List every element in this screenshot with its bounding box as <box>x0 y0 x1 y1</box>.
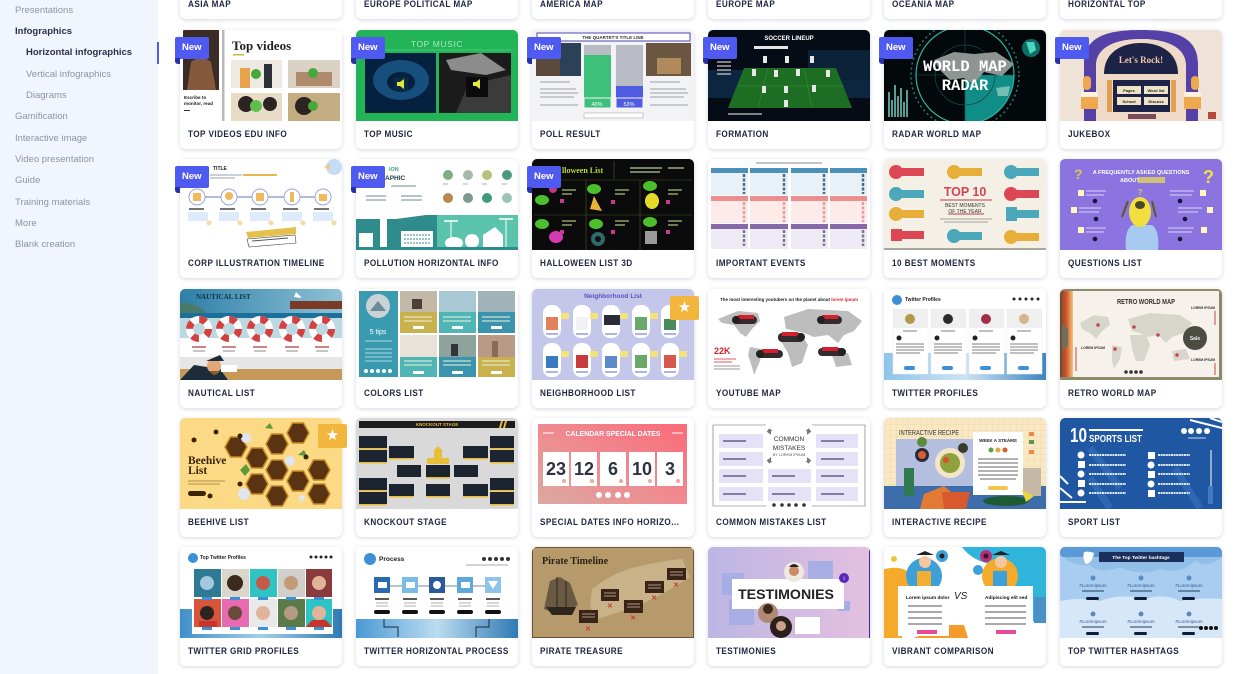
title: SPECIAL DATES INFO HORIZO... <box>540 517 679 528</box>
thumbnail: knockout bracket: KNOCKOUT STAGE <box>416 422 458 427</box>
thumbnail: pollution <box>356 160 518 250</box>
card: YouTube map <box>708 289 870 408</box>
thumbnail: nautical <box>180 289 342 380</box>
title: TWITTER GRID PROFILES <box>188 646 299 657</box>
title: NEIGHBORHOOD LIST <box>540 388 636 399</box>
title: POLLUTION HORIZONTAL INFO <box>364 258 499 269</box>
thumbnail: top videos: monitor, read <box>184 101 213 106</box>
title: POLL RESULT <box>540 129 601 140</box>
thumbnail: knockout bracket <box>356 418 518 509</box>
badge: new <box>351 37 385 59</box>
thumbnail: pirate map: ✕ <box>651 595 657 602</box>
thumbnail: halloween: lloween List <box>562 166 603 175</box>
badge: new <box>527 37 561 59</box>
card: Sport list <box>1060 418 1222 537</box>
card: Colors list <box>356 289 518 408</box>
badge: new <box>175 166 209 188</box>
card: Testimonies <box>708 547 870 666</box>
thumbnail: sports list: 10 <box>1070 425 1087 447</box>
thumbnail: testimonies: TESTIMONIES <box>738 587 834 602</box>
thumbnail: radar <box>884 30 1046 121</box>
badge: new: New <box>358 171 378 182</box>
thumbnail: halloween <box>532 159 694 250</box>
badge: new: New <box>534 171 554 182</box>
card: America map <box>532 0 694 19</box>
title: NAUTICAL LIST <box>188 388 255 399</box>
sidebar navigation: Interactive image <box>15 133 87 144</box>
thumbnail: comparison <box>884 547 1046 638</box>
card: Radar world map <box>884 30 1046 149</box>
card: Retro world map <box>1060 289 1222 408</box>
thumbnail: sports list <box>1060 418 1222 509</box>
title: COLORS LIST <box>364 388 424 399</box>
thumbnail: top 10 ribbons: OF THE YEAR <box>948 209 982 215</box>
thumbnail: calendar special dates <box>534 419 687 504</box>
badge: new <box>879 37 913 59</box>
thumbnail: pirate map: ✕ <box>585 626 591 633</box>
badge: new <box>527 166 561 188</box>
badge: new <box>175 37 209 59</box>
title: JUKEBOX <box>1068 129 1111 140</box>
thumbnail: soccer formation <box>708 30 870 121</box>
thumbnail: sports list: SPORTS LIST <box>1089 434 1142 445</box>
title: TESTIMONIES <box>716 646 776 657</box>
thumbnail: common mistakes: MISTAKES <box>773 445 806 452</box>
sidebar navigation: Blank creation <box>15 239 75 250</box>
title: VIBRANT COMPARISON <box>892 646 994 657</box>
thumbnail: pirate map: Pirate Timeline <box>542 556 609 567</box>
thumbnail: interactive recipe <box>884 418 1046 509</box>
thumbnail: colors grid <box>358 290 515 377</box>
badge: new <box>703 37 737 59</box>
thumbnail: pollution: ION <box>389 167 399 173</box>
card: Questions list <box>1060 159 1222 278</box>
thumbnail: twitter profiles: Twitter Profiles <box>905 297 941 303</box>
sidebar navigation: Infographics <box>15 26 72 37</box>
thumbnail: jukebox: Word list <box>1147 88 1165 93</box>
thumbnail: poll result <box>532 30 694 121</box>
badge: new: New <box>710 42 730 53</box>
thumbnail: youtube map: The most interesting youtubers on the planet about lorem ipsum <box>720 297 858 302</box>
thumbnail: testimonies <box>708 547 870 638</box>
badge: new: New <box>182 42 202 53</box>
thumbnail: radar: RADAR <box>942 77 989 95</box>
thumbnail: youtube map <box>710 290 862 375</box>
thumbnail: retro map: RETRO WORLD MAP <box>1117 297 1175 306</box>
card: Halloween list 3D <box>532 159 694 278</box>
thumbnail: top 10 ribbons: BEST MOMENTS <box>945 203 986 209</box>
thumbnail: questions: ? <box>1203 167 1214 187</box>
title: IMPORTANT EVENTS <box>716 258 806 269</box>
title: RADAR WORLD MAP <box>892 129 982 140</box>
thumbnail: interactive recipe: INTERACTIVE RECIPE <box>899 430 959 437</box>
card: Beehive list <box>180 418 342 537</box>
thumbnail: colors grid: 5 tips <box>370 329 387 336</box>
thumbnail: poll result: 53% <box>623 102 635 108</box>
card: Corp illustration timeline <box>180 159 342 278</box>
thumbnail: questions: ? <box>1074 166 1083 182</box>
thumbnail: comparison: Adipiscing elit sed <box>985 595 1027 601</box>
thumbnail: calendar special dates: 10 <box>632 459 652 479</box>
thumbnail: jukebox: Let's Rock! <box>1119 55 1163 65</box>
thumbnail: jukebox: School <box>1122 99 1136 104</box>
thumbnail: interactive recipe: WEEK A STEAMS <box>979 438 1017 443</box>
title: CORP ILLUSTRATION TIMELINE <box>188 258 325 269</box>
thumbnail: common mistakes <box>710 419 866 507</box>
thumbnail: retro map <box>1060 289 1222 380</box>
sidebar navigation: Presentations <box>15 5 73 16</box>
thumbnail: neighborhood <box>532 289 694 380</box>
title: BEEHIVE LIST <box>188 517 249 528</box>
thumbnail: top videos: Escribe to <box>184 95 206 100</box>
thumbnail: calendar special dates: 12 <box>574 459 594 479</box>
thumbnail: beehive: List <box>188 465 207 477</box>
card: Important events <box>708 159 870 278</box>
card: Vibrant comparison <box>884 547 1046 666</box>
card: Formation <box>708 30 870 149</box>
thumbnail: twitter grid: Top Twitter Profiles <box>200 555 246 561</box>
thumbnail: soccer formation: SOCCER LINEUP <box>764 36 814 42</box>
title: RETRO WORLD MAP <box>1068 388 1157 399</box>
title: YOUTUBE MAP <box>716 388 781 399</box>
card: Oceania map <box>884 0 1046 19</box>
thumbnail: top videos: Top videos <box>232 38 291 53</box>
thumbnail: poll result: THE QUARTET'S TITLE LINE <box>582 35 644 40</box>
card: Twitter horizontal process <box>356 547 518 666</box>
badge: new: New <box>182 171 202 182</box>
thumbnail: calendar special dates: 6 <box>608 459 618 479</box>
title: SPORT LIST <box>1068 517 1120 528</box>
thumbnail: jukebox: Discuss <box>1148 99 1164 104</box>
thumbnail: pollution: APHIC <box>385 175 406 182</box>
sidebar navigation: More <box>15 218 37 229</box>
badge: new: New <box>534 42 554 53</box>
sidebar navigation: Diagrams <box>26 90 67 101</box>
thumbnail: beehive: Beehive <box>188 455 226 467</box>
card: Pollution horizontal info <box>356 159 518 278</box>
thumbnail: neighborhood: Neighborhood List <box>584 293 643 300</box>
badge: new <box>1055 37 1089 59</box>
thumbnail: hashtags: The Top Twitter hashtags <box>1112 555 1170 561</box>
thumbnail: hashtags: #Loremipsum <box>1127 583 1155 588</box>
card: Neighborhood list <box>532 289 694 408</box>
thumbnail: pirate map: ✕ <box>630 615 636 622</box>
thumbnail: top music <box>356 30 518 121</box>
thumbnail: calendar special dates: 3 <box>665 459 675 479</box>
title: TWITTER HORIZONTAL PROCESS <box>364 646 509 657</box>
card: Asia map <box>180 0 342 19</box>
thumbnail: twitter profiles <box>884 290 1046 380</box>
card: Interactive recipe <box>884 418 1046 537</box>
sidebar navigation: Horizontal infographics <box>26 47 132 58</box>
title: TOP TWITTER HASHTAGS <box>1068 646 1179 657</box>
thumbnail: pirate map: ✕ <box>673 582 679 589</box>
thumbnail: questions: ABOUT <box>1120 178 1140 184</box>
thumbnail: pirate map <box>532 547 694 638</box>
thumbnail: top 10 ribbons <box>884 159 1046 250</box>
thumbnail: retro map: LOREM IPSUM <box>1191 358 1215 362</box>
thumbnail: important events table <box>710 160 867 249</box>
title: INTERACTIVE RECIPE <box>892 517 987 528</box>
badge: premium star <box>318 424 347 448</box>
thumbnail: timeline: TITLE <box>213 166 228 172</box>
card: Nautical list <box>180 289 342 408</box>
thumbnail: top videos <box>182 30 340 121</box>
thumbnail: comparison: VS <box>954 591 968 602</box>
sidebar navigation: Vertical infographics <box>26 69 111 80</box>
card: Knockout stage <box>356 418 518 537</box>
card: Top music <box>356 30 518 149</box>
thumbnail: poll result: 46% <box>591 102 603 108</box>
thumbnail: common mistakes: BY LOREM IPSUM <box>773 453 805 457</box>
card: Horizontal top <box>1060 0 1222 19</box>
sidebar navigation: Gamification <box>15 111 68 122</box>
badge: premium star: ★ <box>678 299 691 316</box>
thumbnail: hashtags <box>1060 547 1222 638</box>
title: COMMON MISTAKES LIST <box>716 517 827 528</box>
thumbnail: questions: A FREQUENTLY ASKED QUESTIONS <box>1093 170 1190 176</box>
thumbnail: nautical: NAUTICAL LIST <box>196 293 251 301</box>
badge: premium star <box>670 296 699 320</box>
sidebar navigation: Guide <box>15 175 40 186</box>
thumbnail: common mistakes: COMMON <box>774 436 804 443</box>
thumbnail: twitter grid <box>180 548 342 638</box>
title: QUESTIONS LIST <box>1068 258 1142 269</box>
title: PIRATE TREASURE <box>540 646 623 657</box>
thumbnail: retro map: Sale <box>1190 336 1200 342</box>
badge: new: New <box>886 42 906 53</box>
thumbnail: twitter process <box>356 548 518 638</box>
thumbnail: top 10 ribbons: TOP 10 <box>944 185 986 199</box>
card: Twitter profiles <box>884 289 1046 408</box>
card: Poll result <box>532 30 694 149</box>
thumbnail: radar: WORLD MAP <box>923 58 1007 76</box>
title: TWITTER PROFILES <box>892 388 978 399</box>
thumbnail: hashtags: #Loremipsum <box>1079 619 1107 624</box>
card: Common mistakes list <box>708 418 870 537</box>
thumbnail: hashtags: #Loremipsum <box>1079 583 1107 588</box>
thumbnail: beehive <box>180 418 342 509</box>
thumbnail: testimonies: i <box>843 576 845 582</box>
thumbnail: jukebox: Pages <box>1123 88 1136 93</box>
thumbnail: questions: ? <box>1138 188 1143 197</box>
badge: new: New <box>1062 42 1082 53</box>
thumbnail: top music: TOP MUSIC <box>411 39 463 49</box>
thumbnail: calendar special dates: CALENDAR SPECIAL DATES <box>566 431 661 438</box>
thumbnail: jukebox <box>1060 30 1222 121</box>
thumbnail: timeline <box>182 159 342 248</box>
sidebar navigation <box>0 0 158 674</box>
card: 10 best moments <box>884 159 1046 278</box>
thumbnail: hashtags: #Loremipsum <box>1175 583 1203 588</box>
title: 10 BEST MOMENTS <box>892 258 976 269</box>
badge: new: New <box>358 42 378 53</box>
badge: new <box>351 166 385 188</box>
thumbnail: pirate map: ✕ <box>607 603 613 610</box>
title: FORMATION <box>716 129 769 140</box>
card: Top videos edu info <box>180 30 342 149</box>
title: TOP MUSIC <box>364 129 413 140</box>
badge: premium star: ★ <box>326 427 339 444</box>
card: Europe map <box>708 0 870 19</box>
title: TOP VIDEOS EDU INFO <box>188 129 287 140</box>
thumbnail: youtube map: 22K <box>714 346 731 356</box>
card: Pirate treasure <box>532 547 694 666</box>
thumbnail: hashtags: #Loremipsum <box>1127 619 1155 624</box>
sidebar navigation: Training materials <box>15 197 90 208</box>
card: Europe political map <box>356 0 518 19</box>
card: Top Twitter hashtags <box>1060 547 1222 666</box>
title: HALLOWEEN LIST 3D <box>540 258 633 269</box>
card: Twitter grid profiles <box>180 547 342 666</box>
thumbnail: retro map: LOREM IPSUM <box>1191 306 1215 310</box>
thumbnail: twitter process: Process <box>379 556 405 563</box>
thumbnail: retro map: LOREM IPSUM <box>1081 346 1105 350</box>
thumbnail: questions <box>1060 159 1222 250</box>
card: Jukebox <box>1060 30 1222 149</box>
sidebar navigation: Video presentation <box>15 154 94 165</box>
thumbnail: calendar special dates: 23 <box>546 459 566 479</box>
title: KNOCKOUT STAGE <box>364 517 447 528</box>
thumbnail: hashtags: #Loremipsum <box>1175 619 1203 624</box>
thumbnail: comparison: Lorem ipsum dolor <box>906 595 950 601</box>
card: Special dates info horizontal <box>532 418 694 537</box>
